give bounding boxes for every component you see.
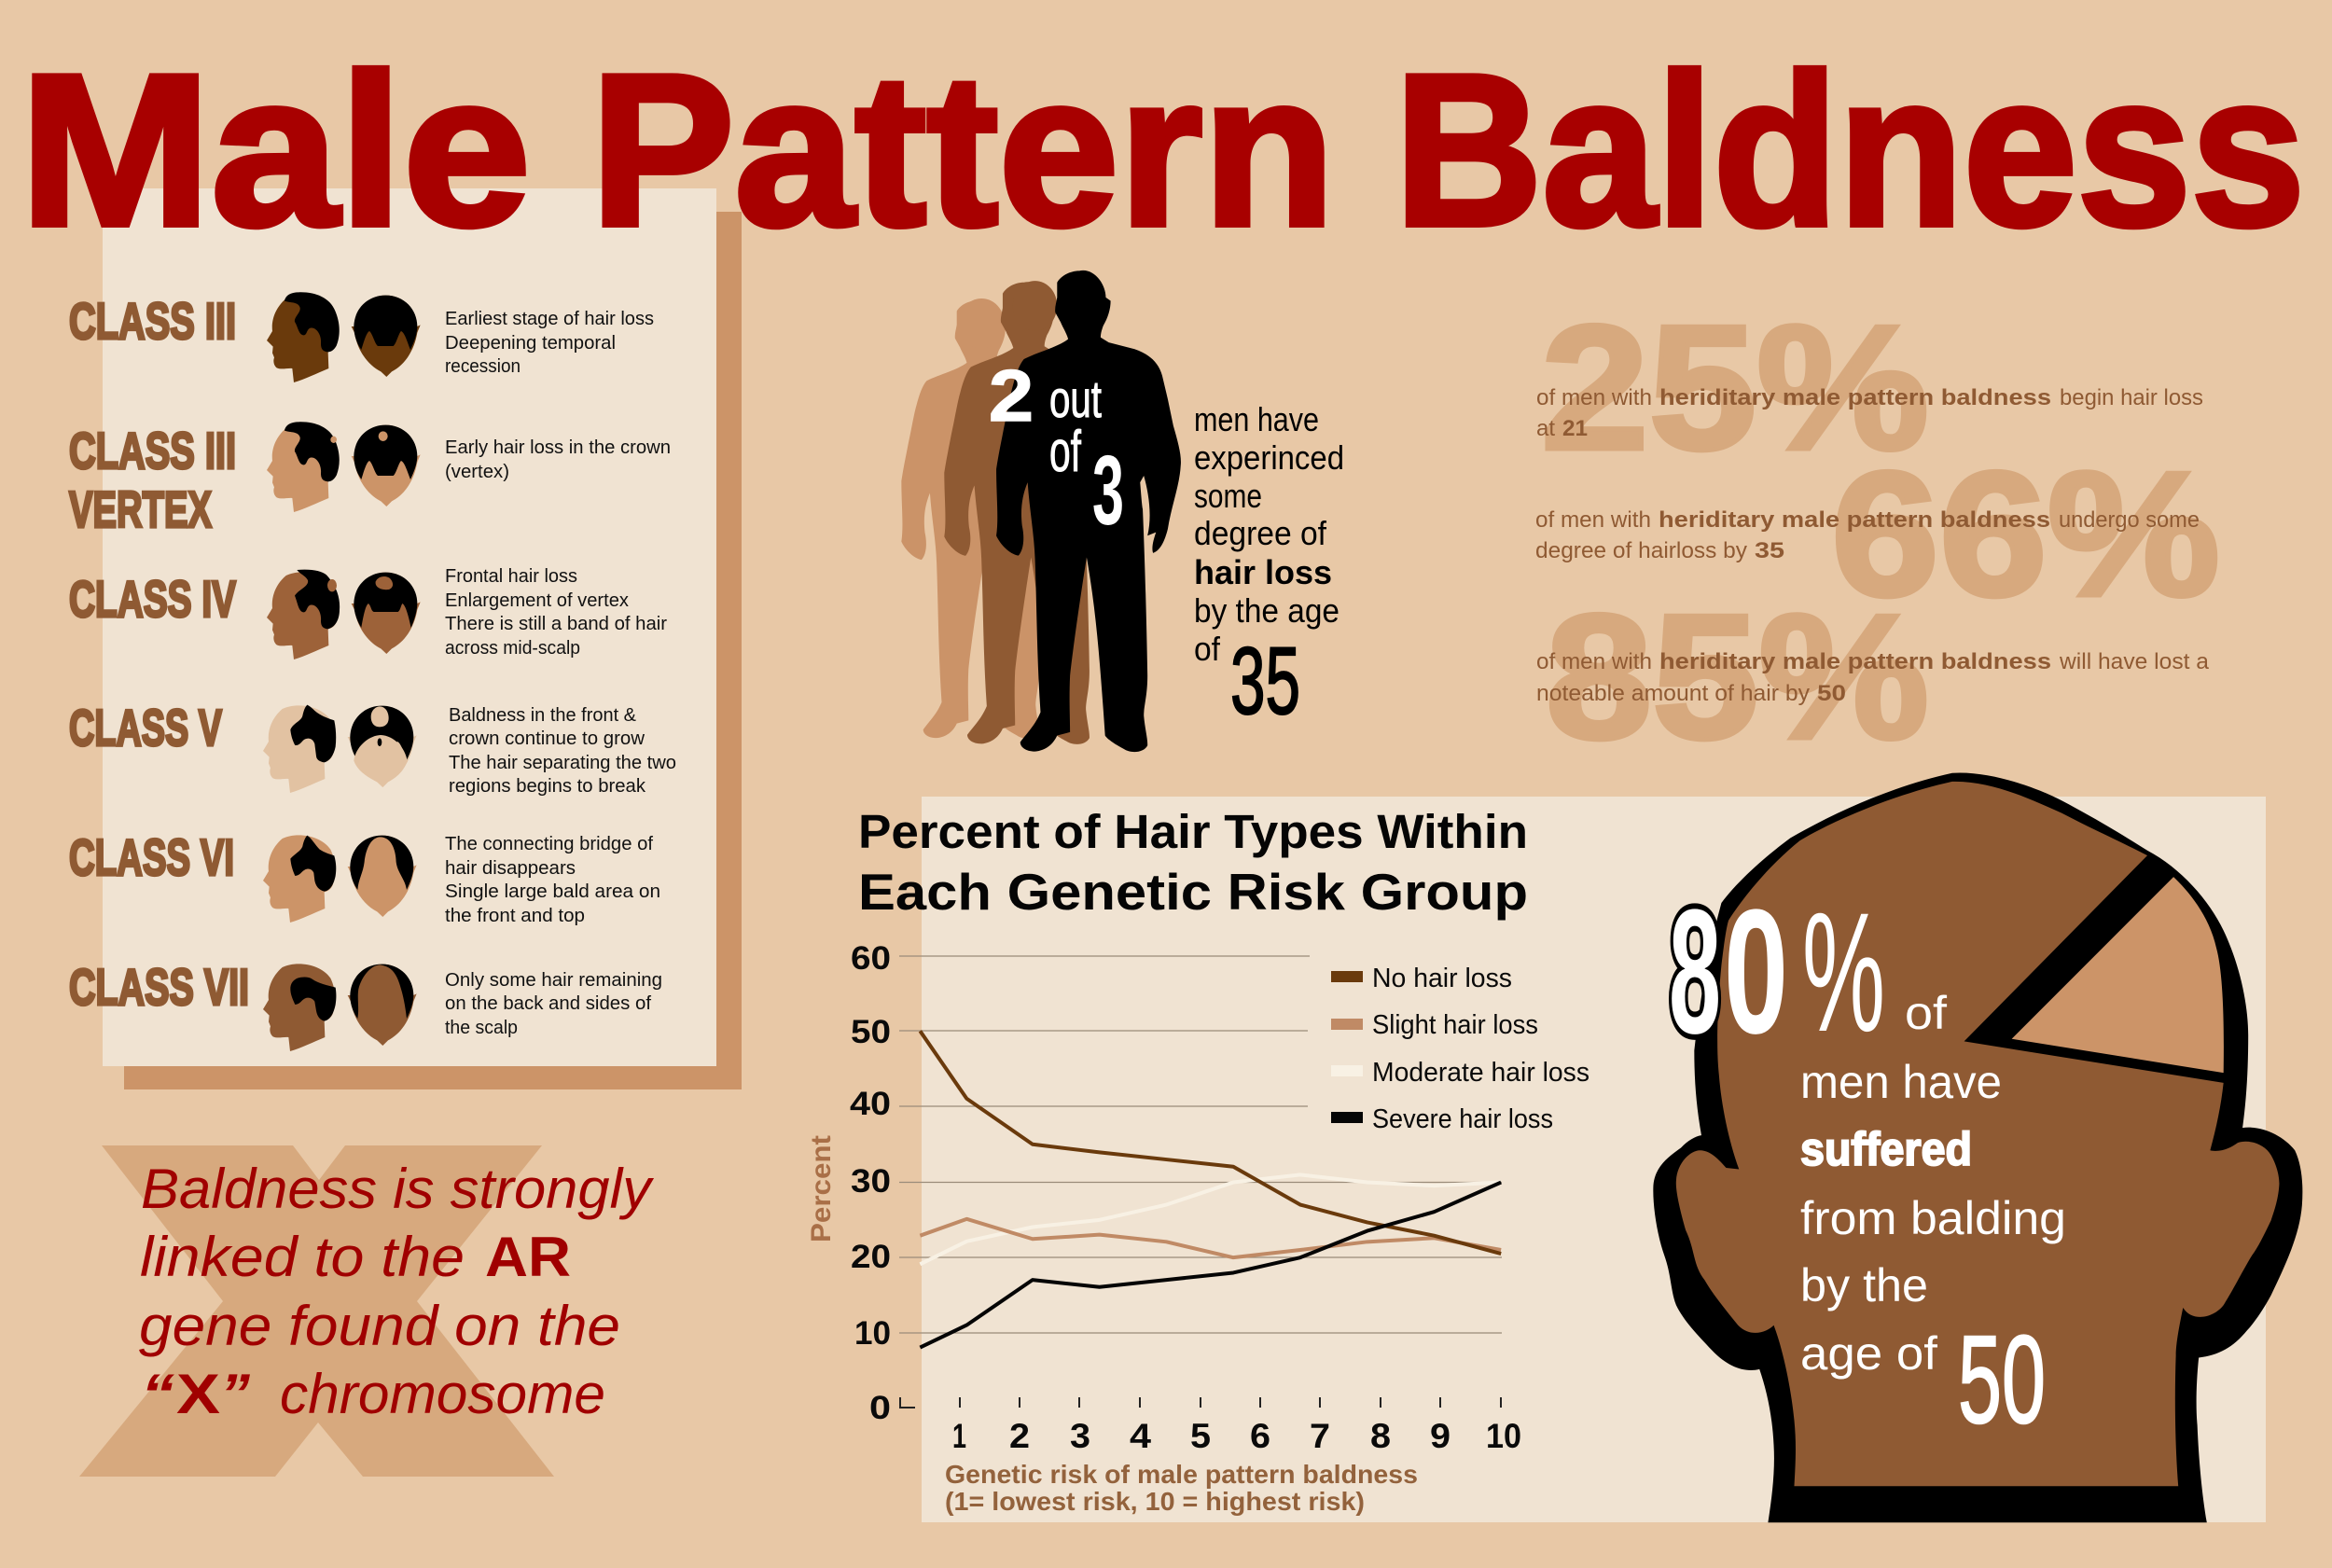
big number 80 percent: 8 — [1669, 873, 1721, 1071]
panel: chart background — [922, 797, 2266, 1522]
legend: Slight hair loss — [1372, 1010, 1538, 1040]
stat sentence: 50 — [1958, 1311, 2046, 1450]
x axis labels: 4 — [1130, 1417, 1151, 1455]
class III label: CLASS III — [69, 292, 236, 350]
class III row — [69, 292, 654, 382]
callout: X chromosome — [79, 1145, 655, 1477]
x axis labels: 5 — [1190, 1417, 1211, 1455]
stat text 85%: 50 — [1817, 681, 1846, 706]
callout text: Baldness is strongly — [141, 1158, 655, 1220]
y axis labels: 30 — [851, 1163, 891, 1200]
stat text 25% — [1536, 385, 2203, 441]
class III vertex description: (vertex) — [445, 462, 509, 482]
class VII description: Only some hair remaining — [445, 970, 662, 991]
callout text: ” — [220, 1363, 250, 1425]
class VI row — [69, 828, 660, 926]
class V description: crown continue to grow — [449, 728, 645, 749]
y axis labels: 20 — [851, 1239, 891, 1275]
class VII description: on the back and sides of — [445, 993, 651, 1014]
x axis labels: 6 — [1250, 1417, 1270, 1455]
line: no hair loss — [920, 1031, 1501, 1254]
y axis labels: 40 — [850, 1086, 891, 1122]
callout text: chromosome — [280, 1363, 605, 1425]
stat sentence — [1800, 987, 2066, 1450]
line: severe hair loss — [920, 1183, 1501, 1348]
class III vertex row — [69, 422, 671, 538]
stat: 66 percent — [1535, 436, 2220, 633]
icon: head pie chart — [1653, 772, 2302, 1522]
stat sentence: of — [1905, 987, 1947, 1039]
class V description: The hair separating the two — [449, 753, 676, 773]
callout text: gene found on the — [139, 1295, 620, 1357]
icon: class V heads — [263, 705, 417, 793]
big number 66%: 66% — [1831, 436, 2220, 633]
text: men have experienced hair loss: 35 — [1230, 628, 1300, 734]
icon: middle man — [944, 281, 1121, 744]
icon: back man — [901, 298, 1069, 739]
legend: No hair loss — [1372, 964, 1512, 993]
stat: 2 out of 3: out — [1049, 369, 1102, 428]
y axis labels: 10 — [854, 1315, 891, 1352]
stat text 85%: noteable amount of hair by — [1536, 681, 1810, 706]
x axis title — [945, 1460, 1418, 1516]
callout text: “ — [141, 1363, 174, 1425]
big number 80 percent: % — [1802, 877, 1885, 1067]
class VII description — [445, 970, 662, 1038]
stat text 25%: begin hair loss — [2060, 385, 2203, 410]
text: men have experienced hair loss: degree of — [1194, 514, 1327, 552]
stat sentence: age of — [1800, 1327, 1937, 1380]
line chart — [806, 940, 1589, 1516]
class V description: Baldness in the front & — [449, 705, 637, 726]
stat text 85%: of men with — [1536, 649, 1652, 674]
stat text 66%: of men with — [1535, 507, 1651, 533]
icon: class VII heads — [263, 964, 417, 1051]
x axis labels: 2 — [1009, 1417, 1030, 1455]
stat text 66%: undergo some — [2059, 507, 2200, 533]
stat text 25%: at — [1536, 416, 1555, 441]
big number 80 percent: 0 — [1724, 873, 1788, 1071]
text: men have experienced hair loss: of — [1194, 630, 1221, 668]
class III description: recession — [445, 356, 521, 377]
text: men have experienced hair loss — [1194, 400, 1344, 734]
class VI description — [445, 834, 660, 926]
icon: class IV heads — [267, 570, 421, 659]
class VII label: CLASS VII — [69, 958, 249, 1016]
class VI description: hair disappears — [445, 858, 576, 879]
legend: Moderate hair loss — [1372, 1058, 1589, 1088]
y axis labels — [850, 940, 891, 1426]
icon: class III heads — [267, 292, 421, 382]
stat text 25%: heriditary male pattern baldness — [1659, 385, 2051, 410]
stat text 85%: will have lost a — [2059, 649, 2210, 674]
stat: 2 out of 3: 3 — [1092, 436, 1124, 546]
class III description: Earliest stage of hair loss — [445, 309, 654, 329]
class IV description: Enlargement of vertex — [445, 590, 629, 611]
text: men have experienced hair loss: hair loss — [1194, 553, 1332, 591]
title — [20, 30, 2305, 271]
big number 80 percent — [1669, 873, 1885, 1071]
icon: large X shape — [79, 1145, 554, 1477]
stat text 66%: 35 — [1755, 538, 1784, 563]
title: Baldness — [1395, 30, 2305, 271]
class IV description: There is still a band of hair — [445, 614, 667, 634]
stat text 66% — [1535, 507, 2200, 563]
y axis labels: 60 — [851, 940, 891, 977]
title: Male — [20, 30, 531, 271]
class VI label: CLASS VI — [69, 828, 234, 886]
head outline — [1653, 772, 2302, 1522]
callout text — [139, 1158, 655, 1425]
class IV description — [445, 566, 667, 659]
icon: front man — [996, 271, 1181, 752]
stat text 25%: 21 — [1562, 416, 1588, 441]
legend: Severe hair loss — [1372, 1104, 1553, 1134]
text: men have experienced hair loss: by the age — [1194, 591, 1340, 630]
class V row — [69, 699, 676, 797]
class VII row — [69, 958, 662, 1051]
callout text: X — [176, 1363, 220, 1425]
x axis labels: 10 — [1486, 1417, 1521, 1455]
stat: 25 percent — [1536, 289, 2203, 487]
panel: hair loss classes — [103, 188, 742, 1089]
stat sentence: from balding — [1800, 1192, 2066, 1244]
x axis labels: 9 — [1430, 1417, 1451, 1455]
text: men have experienced hair loss: experinced — [1194, 438, 1344, 477]
head pie slice — [2012, 877, 2224, 1073]
data lines — [920, 1031, 1501, 1348]
class VI description: The connecting bridge of — [445, 834, 653, 854]
class VII description: the scalp — [445, 1018, 518, 1038]
class V description — [449, 705, 676, 797]
title: Pattern — [590, 30, 1335, 271]
legend — [1331, 964, 1589, 1134]
stat text 25%: of men with — [1536, 385, 1652, 410]
class VI description: Single large bald area on — [445, 881, 660, 902]
icon: class VI heads — [263, 835, 417, 923]
class III vertex label — [69, 422, 236, 538]
stat: 2 out of 3 — [989, 354, 1124, 546]
stat: 80 percent of men — [1669, 873, 2066, 1450]
stat: 2 out of 3: of — [1049, 420, 1082, 484]
y axis title: Percent — [806, 1135, 837, 1242]
icon: class III vertex heads — [267, 422, 421, 512]
x axis labels: 3 — [1070, 1417, 1090, 1455]
class III vertex description: Early hair loss in the crown — [445, 437, 671, 458]
class V description: regions begins to break — [449, 776, 646, 797]
x axis labels: 7 — [1310, 1417, 1330, 1455]
chart heading: Each Genetic Risk Group — [858, 863, 1528, 921]
axis ticks — [900, 1397, 1501, 1408]
class IV label: CLASS IV — [69, 570, 236, 628]
class III description: Deepening temporal — [445, 333, 616, 354]
stat sentence: suffered — [1800, 1123, 1972, 1175]
class IV description: Frontal hair loss — [445, 566, 577, 587]
big number 85%: 85% — [1546, 578, 1929, 776]
y axis labels: 0 — [869, 1390, 891, 1426]
stat text 85% — [1536, 649, 2210, 706]
text: men have experienced hair loss: men have — [1194, 400, 1319, 438]
class IV description: across mid-scalp — [445, 638, 580, 659]
text: men have experienced hair loss: some — [1194, 477, 1262, 515]
callout text: AR — [485, 1226, 571, 1288]
x axis title: (1= lowest risk, 10 = highest risk) — [945, 1487, 1365, 1516]
line: slight hair loss — [920, 1219, 1501, 1257]
callout text: linked to the — [140, 1226, 465, 1288]
class V label: CLASS V — [69, 699, 222, 756]
men silhouettes — [901, 271, 1181, 752]
x axis labels: 1 — [952, 1417, 966, 1455]
stat text 66%: heriditary male pattern baldness — [1659, 507, 2050, 533]
x axis labels: 8 — [1370, 1417, 1391, 1455]
class VI description: the front and top — [445, 906, 585, 926]
big number 25%: 25% — [1541, 289, 1929, 487]
head main fill — [1676, 782, 2279, 1486]
x axis title: Genetic risk of male pattern baldness — [945, 1460, 1418, 1489]
chart heading — [858, 805, 1528, 921]
stat text 66%: degree of hairloss by — [1535, 538, 1747, 563]
class III vertex description — [445, 437, 671, 482]
stat sentence: by the — [1800, 1259, 1928, 1311]
stat: 85 percent — [1536, 578, 2210, 776]
class III description — [445, 309, 654, 377]
x axis labels — [952, 1417, 1521, 1455]
class IV row — [69, 566, 667, 659]
stat: 2 out of 3: 2 — [989, 354, 1034, 437]
stat text 85%: heriditary male pattern baldness — [1659, 649, 2051, 674]
stat sentence: men have — [1800, 1056, 2002, 1108]
chart heading: Percent of Hair Types Within — [858, 805, 1528, 858]
class III vertex label: CLASS III — [69, 422, 236, 479]
big number 80 percent: 8 — [1669, 873, 1721, 1071]
line: moderate hair loss — [920, 1174, 1501, 1264]
class III vertex label: VERTEX — [69, 480, 212, 538]
y axis labels: 50 — [851, 1014, 891, 1050]
